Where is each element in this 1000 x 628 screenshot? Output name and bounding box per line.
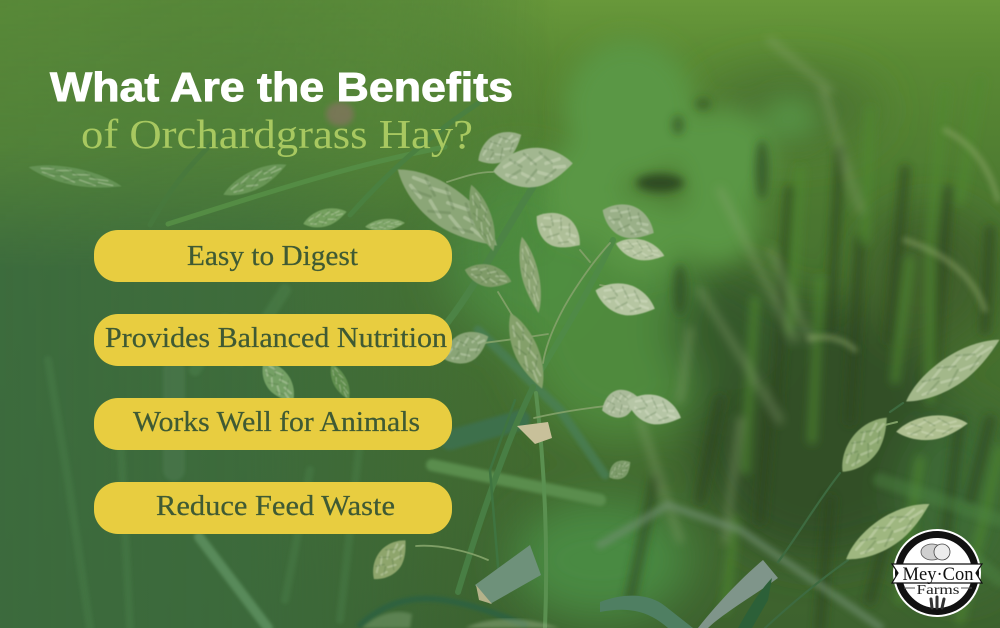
benefit pill: Provides Balanced Nutrition	[94, 314, 452, 366]
logo name: Mey·Con	[902, 564, 974, 585]
title line 2: of Orchardgrass Hay?	[81, 111, 473, 157]
dark gaps between leaves	[636, 98, 769, 316]
logo ribbon	[892, 564, 982, 583]
benefit pill: Easy to Digest: Easy to Digest	[187, 240, 358, 272]
icon: hay bale	[921, 544, 950, 560]
foreground grass blades and stems	[150, 102, 903, 628]
benefit pill: Works Well for Animals: Works Well for Animals	[133, 406, 420, 438]
benefit pill: Easy to Digest	[94, 230, 452, 282]
logo subtitle: Farms	[916, 583, 960, 598]
benefit pill: Works Well for Animals	[94, 398, 452, 450]
clover leaves	[545, 40, 818, 275]
orchardgrass seed heads	[27, 123, 1000, 587]
title	[50, 64, 513, 157]
logo: Mey-Con Farms	[892, 529, 982, 617]
benefit pill: Provides Balanced Nutrition: Provides Balanced Nutrition	[105, 322, 448, 354]
title line 1: What Are the Benefits	[50, 64, 513, 110]
icon: wheat	[931, 597, 944, 608]
benefit pill: Reduce Feed Waste: Reduce Feed Waste	[156, 490, 395, 522]
bottom leaves	[362, 422, 778, 628]
vertical grass stripes	[630, 40, 1000, 628]
left blades	[48, 290, 605, 628]
benefit pill: Reduce Feed Waste	[94, 482, 452, 534]
